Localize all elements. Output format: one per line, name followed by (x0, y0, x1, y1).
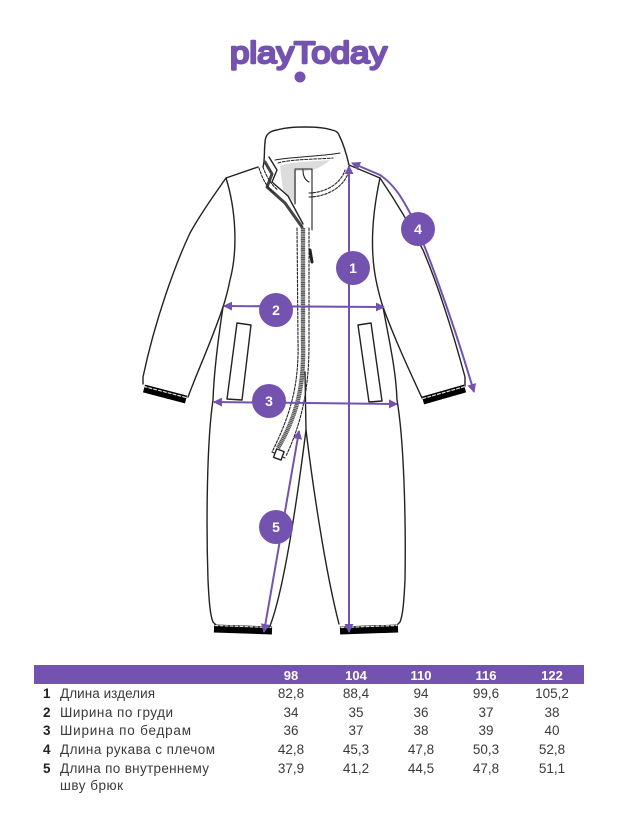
row 2: 36 (413, 705, 429, 720)
row 3: 40 (544, 723, 560, 738)
right sleeve cuff (423, 386, 465, 400)
row 3: 37 (348, 723, 364, 738)
measurement 4: sleeve length: 4 (414, 221, 422, 237)
measurement 1: garment length: 1 (349, 260, 357, 276)
row 3 (43, 723, 560, 738)
row 3: 38 (413, 723, 429, 738)
row 2: 34 (283, 705, 299, 720)
row 5 (43, 761, 565, 793)
measurement 3: hip width: 3 (265, 393, 273, 409)
neck seam (259, 167, 278, 193)
row 2: 35 (348, 705, 364, 720)
garment: jumpsuit technical drawing (143, 127, 465, 630)
row 5: шву брюк (60, 778, 123, 793)
measurement 4: sleeve length (352, 163, 474, 392)
row 5: 47,8 (473, 761, 499, 776)
row 5: Длина по внутреннему (60, 761, 209, 776)
measurement 5: inseam length (259, 431, 299, 632)
row 3: 39 (478, 723, 494, 738)
row 1 (43, 686, 569, 701)
row 1: 88,4 (343, 686, 370, 701)
measurement 5: inseam length: 5 (272, 519, 280, 535)
row 2 (43, 705, 560, 720)
left leg cuff (214, 626, 272, 630)
right leg cuff (340, 626, 398, 630)
row 3: Ширина по бедрам (60, 723, 191, 738)
row 4: 4 (43, 742, 51, 757)
row 2: 2 (43, 705, 51, 720)
table header: 116 (476, 668, 496, 683)
left sleeve and shoulder (143, 167, 258, 397)
row 4: 50,3 (473, 742, 499, 757)
row 1: 1 (43, 686, 51, 701)
measurement 2: chest width (224, 293, 384, 327)
row 4: 52,8 (539, 742, 565, 757)
row 2: 38 (544, 705, 560, 720)
pockets (227, 323, 251, 400)
table header: 98 (284, 668, 298, 683)
row 5: 51,1 (539, 761, 565, 776)
row 4: 45,3 (343, 742, 369, 757)
row 5: 37,9 (278, 761, 304, 776)
row 2: Ширина по груди (60, 705, 173, 720)
table header: 104 (345, 668, 368, 683)
row 5: 44,5 (408, 761, 434, 776)
measurement 2: chest width: 2 (272, 302, 280, 318)
zipper (272, 228, 312, 460)
measurement 1: garment length (336, 166, 370, 632)
table header: 110 (411, 668, 431, 683)
row 5: 41,2 (343, 761, 369, 776)
table header: 122 (541, 668, 563, 683)
row 3: 3 (43, 723, 51, 738)
measurement 3: hip width (214, 384, 397, 418)
row 2: 37 (478, 705, 494, 720)
right sleeve and shoulder (349, 165, 465, 398)
row 4: 47,8 (408, 742, 434, 757)
row 1: 99,6 (473, 686, 499, 701)
table header (34, 665, 584, 684)
size table (34, 665, 584, 793)
logo: playToday (230, 35, 388, 82)
row 3: 36 (283, 723, 299, 738)
row 1: Длина изделия (60, 686, 155, 701)
row 1: 105,2 (535, 686, 569, 701)
logo: playToday: playToday (230, 35, 388, 70)
row 5: 5 (43, 761, 51, 776)
row 4 (43, 742, 565, 757)
row 1: 94 (413, 686, 429, 701)
body and legs (207, 307, 405, 626)
collar (263, 127, 349, 230)
row 4: 42,8 (278, 742, 304, 757)
left sleeve cuff (144, 386, 186, 400)
row 4: Длина рукава с плечом (60, 742, 215, 757)
row 1: 82,8 (278, 686, 304, 701)
